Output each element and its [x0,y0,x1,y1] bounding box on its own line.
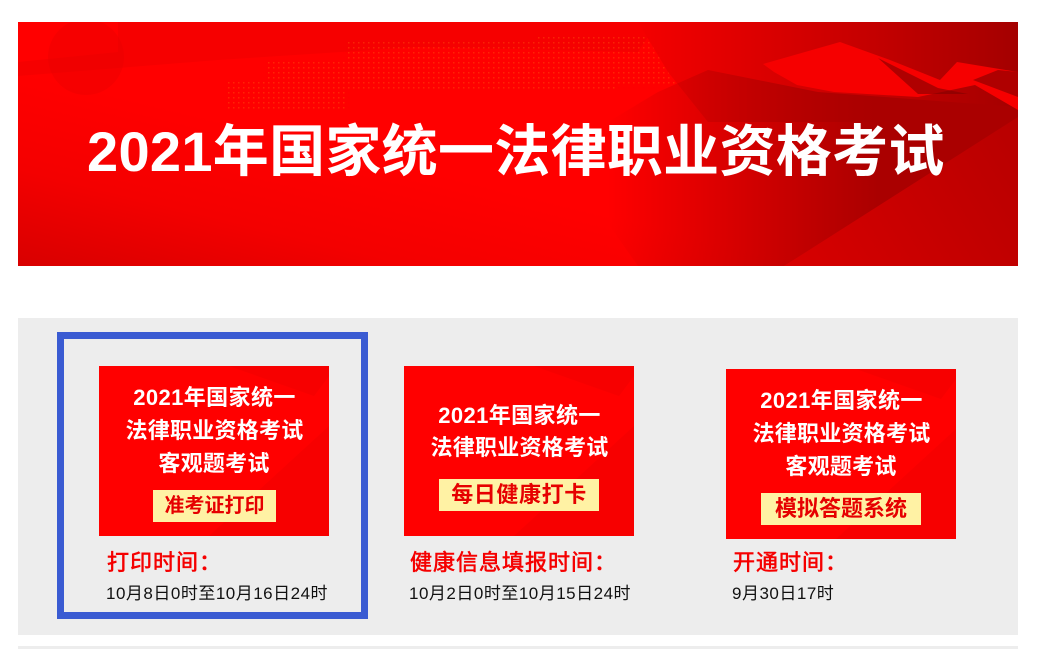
print time: 10月8日0时至10月16日24时 [106,584,328,603]
card backdrop [404,366,634,536]
open time heading: 开通时间： [733,550,848,575]
card label [439,479,599,511]
next panel edge [18,646,1018,649]
banner background art [18,22,1018,266]
health time: 10月2日0时至10月15日24时 [409,584,631,603]
card heading: 2021年国家统一 [760,388,923,413]
handshake shape [763,42,1018,110]
card backdrop [99,366,329,536]
card: mock exam [726,369,956,539]
card label: 模拟答题系统 [775,496,907,521]
banner [18,22,1018,266]
card label: 准考证打印 [164,495,264,517]
open time: 9月30日17时 [732,584,834,603]
highlight frame [57,332,368,619]
panel: exam services [18,318,1018,635]
print time heading: 打印时间： [107,550,222,575]
card label: 每日健康打卡 [451,482,587,507]
card heading: 2021年国家统一 [438,403,601,428]
card: mock exam: 法律职业资格考试 [752,421,930,446]
card: admission ticket: 法律职业资格考试 [125,418,304,443]
card: mock exam: 客观题考试 [785,454,897,479]
card: admission ticket [99,366,329,536]
card: daily health [404,366,634,536]
card heading: 2021年国家统一 [133,385,296,410]
health time heading: 健康信息填报时间： [410,550,617,575]
banner title: 2021年国家统一法律职业资格考试 [87,120,945,183]
card backdrop [726,369,956,539]
card: daily health: 法律职业资格考试 [430,435,608,460]
card: admission ticket: 客观题考试 [158,451,270,476]
card label [761,493,921,525]
card label [153,490,276,522]
